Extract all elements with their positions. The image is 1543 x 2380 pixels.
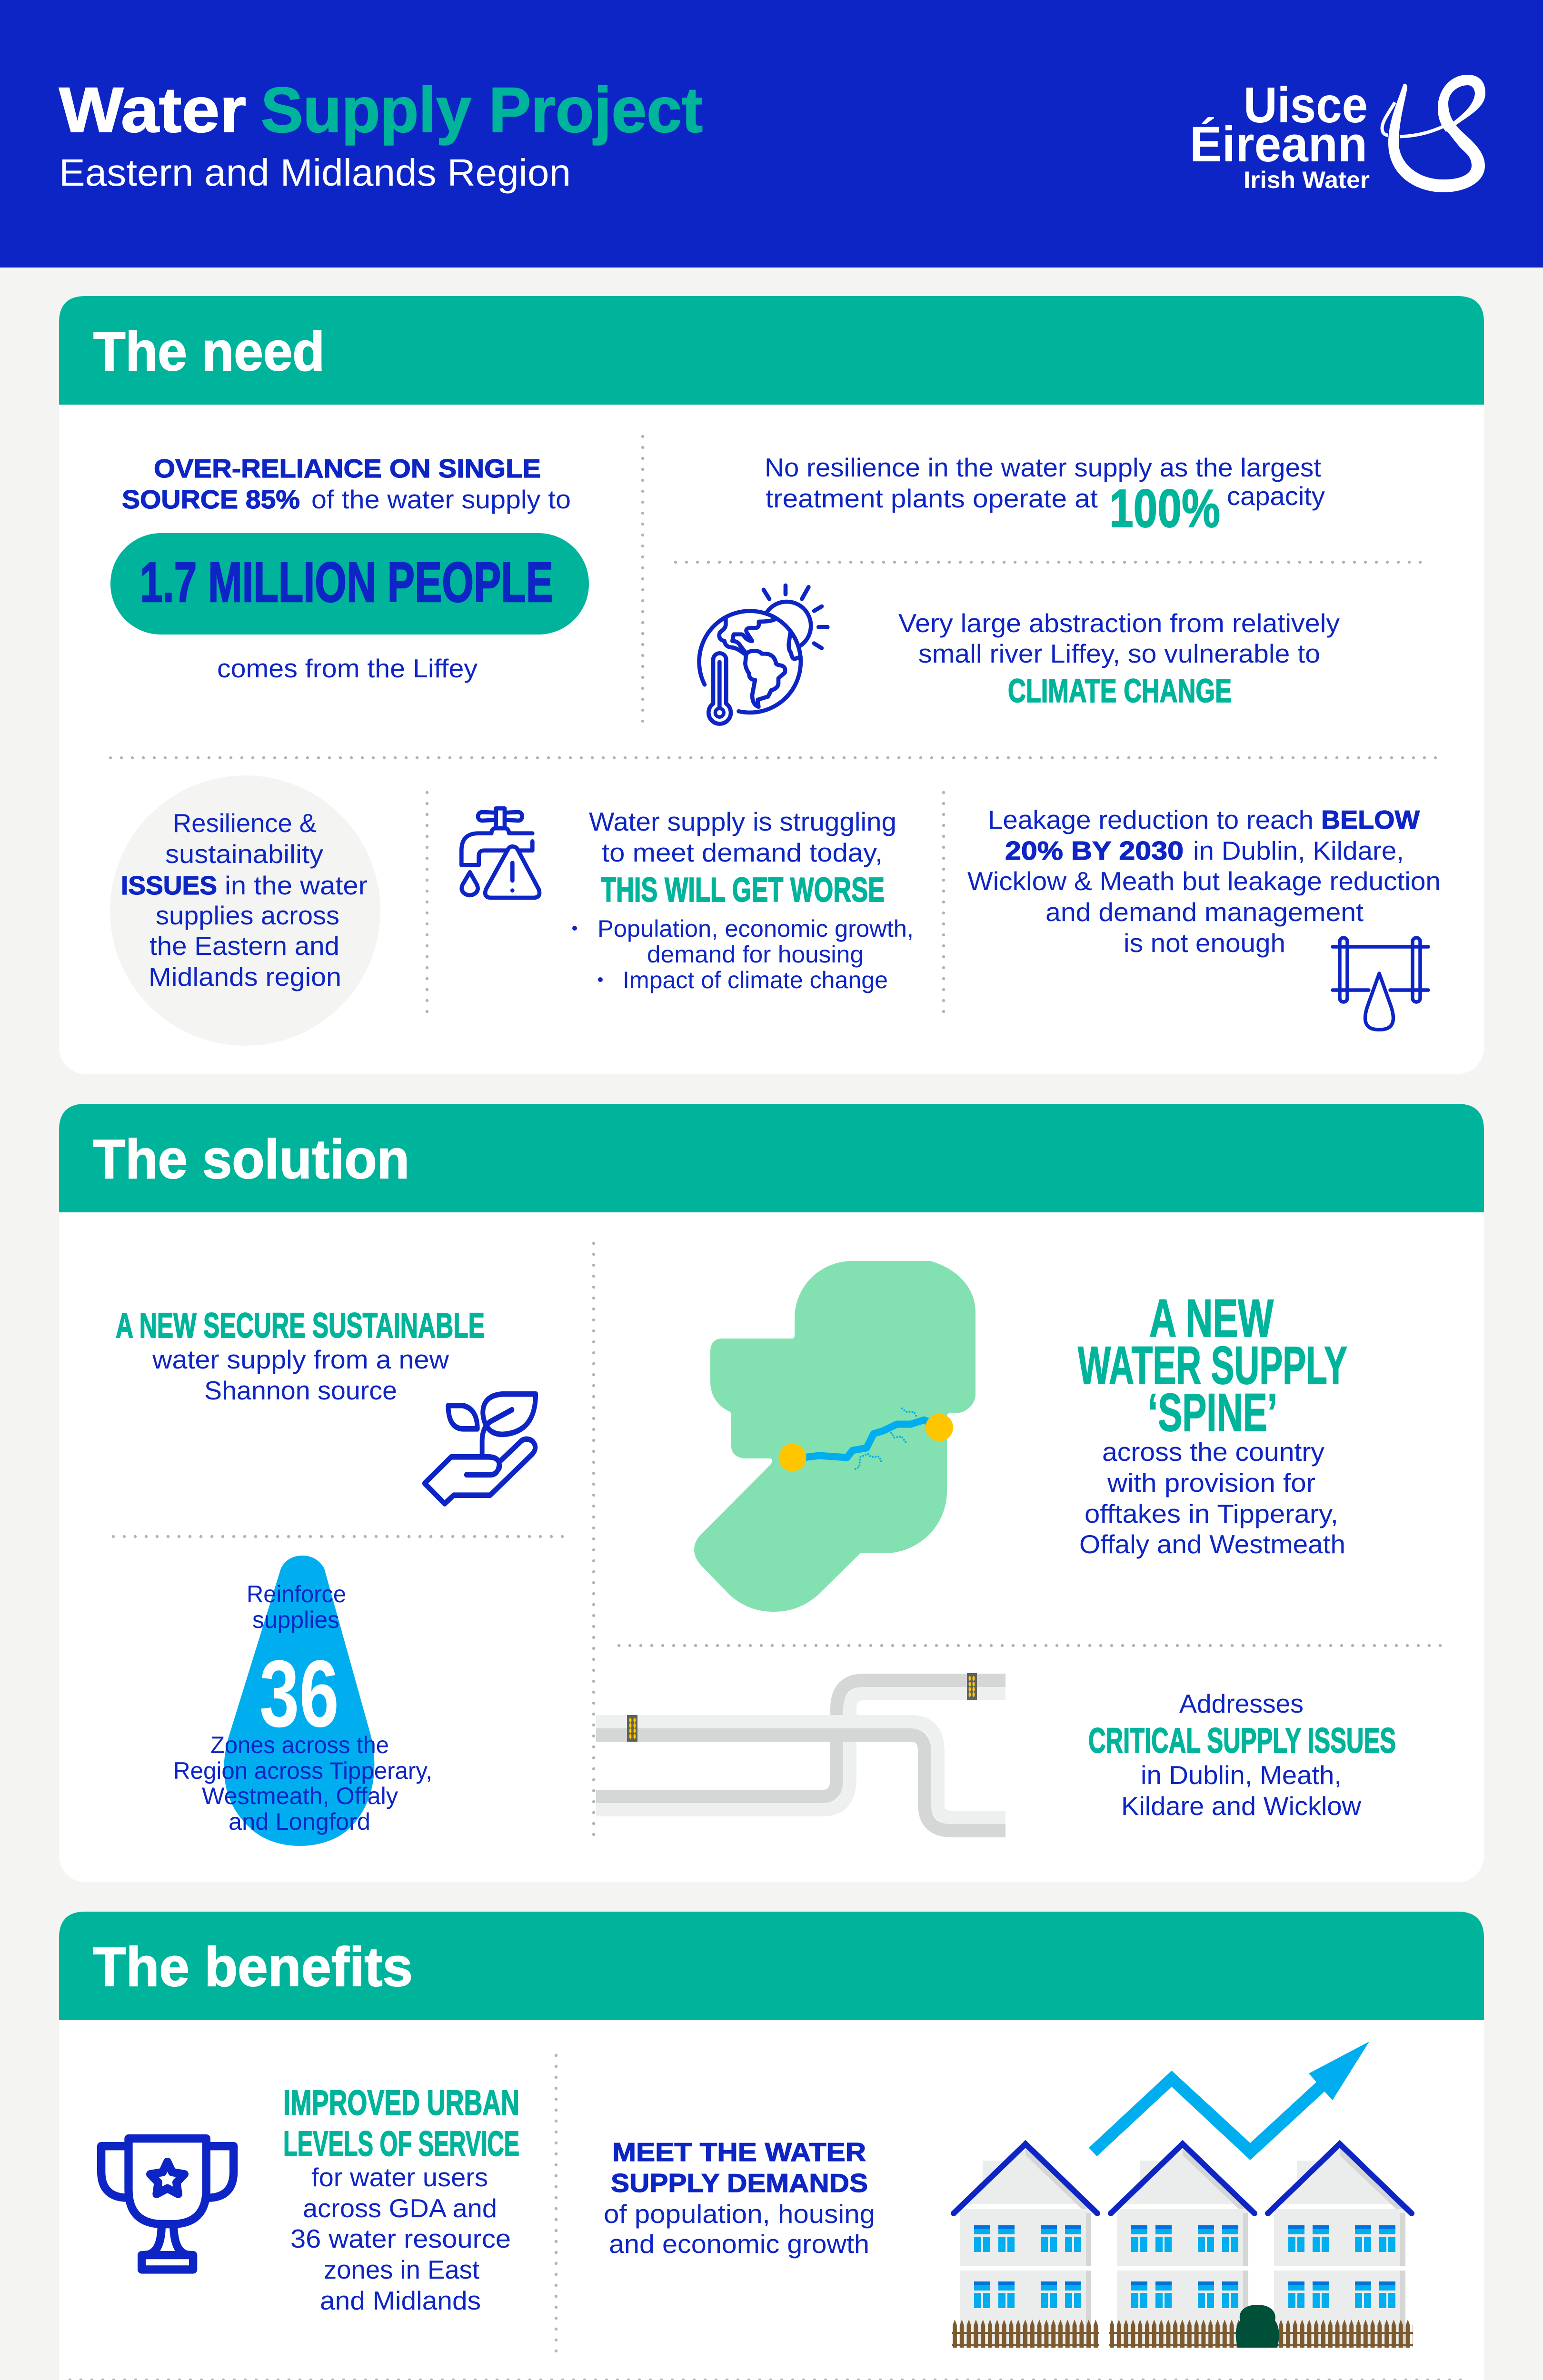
text: new water supply spine: with provision for xyxy=(1107,1468,1315,1497)
icon: hand holding plant xyxy=(425,1394,536,1504)
text: meet the water supply demands: MEET THE WATER xyxy=(612,2137,866,2167)
text: over-reliance on single source: OVER-RELIANCE ON SINGLE xyxy=(154,454,541,483)
text: water supply is struggling: Impact of climate change xyxy=(623,967,888,993)
callout: 1.7 million people xyxy=(110,533,589,635)
heading: the benefits: The benefits xyxy=(93,1936,413,1998)
text: water supply is struggling: demand for housing xyxy=(647,941,864,968)
arrow: rising growth line xyxy=(1089,2042,1369,2160)
text: new water supply spine: A NEW xyxy=(1149,1289,1274,1348)
icon: leaking pipe xyxy=(1333,938,1428,1030)
water drop: reinforce supplies 36 zones: Region across Tipperary, xyxy=(173,1757,432,1784)
text: very large abstraction, climate change xyxy=(898,608,1340,709)
circle callout: resilience and sustainability issues: in the water xyxy=(225,871,368,900)
water drop: reinforce supplies 36 zones: supplies xyxy=(252,1606,339,1633)
circle callout: resilience and sustainability issues: ISSUES xyxy=(121,871,217,900)
title xyxy=(59,75,703,146)
icon: trophy xyxy=(101,2139,234,2270)
text: improved urban levels of service: LEVELS OF SERVICE xyxy=(283,2124,519,2163)
text: new water supply spine: offtakes in Tipperary, xyxy=(1085,1499,1338,1528)
text: meet the water supply demands: of population, housing xyxy=(604,2199,875,2229)
text: new water supply spine xyxy=(1078,1289,1347,1559)
text: no resilience, 100% capacity xyxy=(765,453,1325,538)
text: very large abstraction, climate change: Very large abstraction from relatively xyxy=(898,608,1340,638)
text: over-reliance on single source: SOURCE 85% xyxy=(122,485,300,514)
circle callout: resilience and sustainability issues: sustainability xyxy=(165,839,324,869)
text: over-reliance on single source: of the water supply to xyxy=(311,485,571,514)
header banner xyxy=(0,0,1543,268)
text: water supply is struggling: Water supply is struggling xyxy=(589,807,896,836)
subtitle: Eastern and Midlands Region xyxy=(59,151,571,194)
text: leakage reduction: 20% BY 2030 xyxy=(1005,836,1184,865)
heading: the solution: The solution xyxy=(93,1128,409,1190)
logo: Irish Water xyxy=(1244,167,1370,193)
map: Ireland with spine pipeline xyxy=(694,1261,976,1612)
text: improved urban levels of service: for water users xyxy=(311,2162,488,2192)
text: leakage reduction: in Dublin, Kildare, xyxy=(1193,836,1404,865)
logo xyxy=(1190,75,1485,193)
text: new water supply spine: ‘SPINE’ xyxy=(1148,1383,1277,1442)
text: meet the water supply demands: and economic growth xyxy=(609,2229,869,2259)
water drop: reinforce supplies 36 zones xyxy=(173,1556,432,1846)
logo: Éireann xyxy=(1190,117,1367,172)
text: new water supply spine: Offaly and Westmeath xyxy=(1079,1529,1345,1559)
text: critical supply issues: CRITICAL SUPPLY ISSUES xyxy=(1088,1721,1396,1760)
text: meet the water supply demands: SUPPLY DEMANDS xyxy=(611,2168,868,2198)
icon: globe, sun and thermometer xyxy=(699,585,827,724)
text: water supply is struggling: THIS WILL GET WORSE xyxy=(601,871,885,909)
title: Supply Project xyxy=(261,75,703,146)
panel: the benefits xyxy=(59,1912,1494,2380)
circle callout: resilience and sustainability issues: Resilience & xyxy=(173,808,317,838)
text: no resilience, 100% capacity: No resilience in the water supply as the largest xyxy=(765,453,1321,482)
text: improved urban levels of service xyxy=(283,2083,519,2315)
text: improved urban levels of service: across GDA and xyxy=(303,2193,497,2223)
water drop: reinforce supplies 36 zones: Westmeath, Offaly xyxy=(202,1783,398,1809)
circle callout: resilience and sustainability issues xyxy=(110,775,380,1046)
text: critical supply issues: Kildare and Wicklow xyxy=(1121,1791,1361,1821)
text: leakage reduction: Wicklow & Meath but leakage reduction xyxy=(967,866,1441,896)
text: leakage reduction: Leakage reduction to reach xyxy=(988,805,1314,834)
text: over-reliance on single source xyxy=(122,454,571,514)
text: leakage reduction: BELOW xyxy=(1321,805,1420,834)
circle callout: resilience and sustainability issues: supplies across xyxy=(156,901,339,930)
text: improved urban levels of service: 36 water resource xyxy=(290,2224,511,2253)
text: no resilience, 100% capacity: 100% xyxy=(1109,478,1220,538)
text: new secure sustainable supply: A NEW SECURE SUSTAINABLE xyxy=(116,1306,485,1345)
text: improved urban levels of service: zones in East xyxy=(324,2255,479,2284)
panel: the need xyxy=(59,296,1484,1074)
water drop: reinforce supplies 36 zones: 36 xyxy=(259,1641,339,1747)
text: no resilience, 100% capacity: treatment plants operate at xyxy=(766,484,1098,513)
text: critical supply issues: in Dublin, Meath, xyxy=(1141,1760,1342,1790)
text: new secure sustainable supply: water supply from a new xyxy=(152,1345,449,1374)
panel: the solution xyxy=(59,1104,1484,1882)
text: very large abstraction, climate change: small river Liffey, so vulnerable to xyxy=(918,639,1320,668)
text: critical supply issues: Addresses xyxy=(1179,1689,1304,1718)
water drop: reinforce supplies 36 zones: Reinforce xyxy=(247,1581,346,1607)
text: leakage reduction: is not enough xyxy=(1124,928,1285,958)
heading: the need: The need xyxy=(93,320,325,382)
icon: tap with warning triangle xyxy=(461,808,539,898)
text: water supply is struggling: Population, economic growth, xyxy=(597,915,914,942)
text: comes from the Liffey: comes from the Liffey xyxy=(217,654,478,683)
text: meet the water supply demands xyxy=(604,2137,875,2259)
text: leakage reduction xyxy=(967,805,1441,958)
text: very large abstraction, climate change: CLIMATE CHANGE xyxy=(1008,672,1232,709)
text: new water supply spine: across the country xyxy=(1102,1437,1325,1467)
text: leakage reduction: and demand management xyxy=(1045,897,1364,927)
illustration: row of houses with fence xyxy=(952,2144,1413,2348)
text: new water supply spine: WATER SUPPLY xyxy=(1078,1336,1347,1395)
text: new secure sustainable supply xyxy=(116,1306,485,1405)
text: no resilience, 100% capacity: capacity xyxy=(1227,481,1325,511)
illustration: crossing pipes xyxy=(596,1673,1005,1831)
circle callout: resilience and sustainability issues: Midlands region xyxy=(149,962,341,992)
text: critical supply issues xyxy=(1088,1689,1396,1821)
text: new secure sustainable supply: Shannon source xyxy=(204,1376,397,1405)
circle callout: resilience and sustainability issues: the Eastern and xyxy=(149,931,339,961)
text: improved urban levels of service: IMPROVED URBAN xyxy=(283,2083,519,2122)
title: Water xyxy=(59,75,246,146)
water drop: reinforce supplies 36 zones: and Longford xyxy=(229,1808,370,1835)
logo: Uisce xyxy=(1244,77,1368,133)
text: improved urban levels of service: and Midlands xyxy=(320,2286,481,2315)
water drop: reinforce supplies 36 zones: Zones across the xyxy=(210,1732,389,1758)
callout: 1.7 million people: 1.7 MILLION PEOPLE xyxy=(140,551,553,614)
text: water supply is struggling: to meet demand today, xyxy=(602,838,883,867)
text: water supply is struggling xyxy=(572,807,914,993)
